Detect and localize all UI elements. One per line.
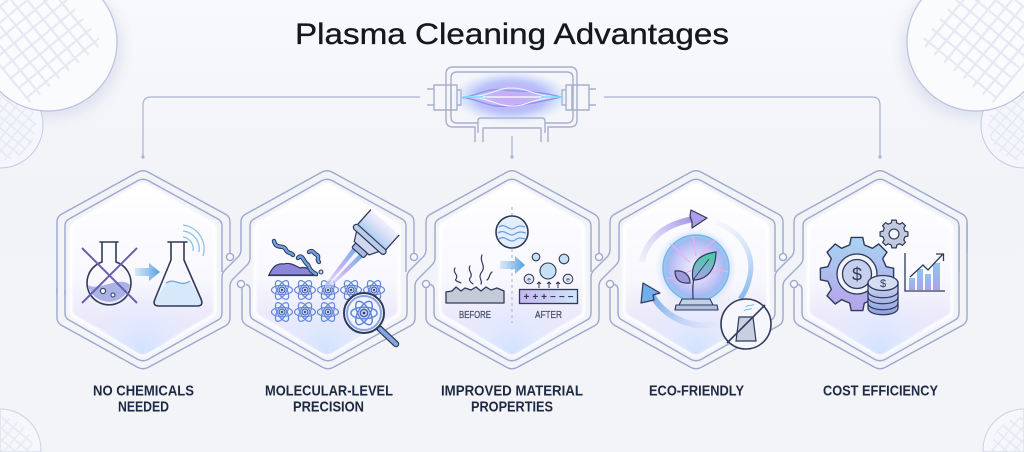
panel: cost efficiency xyxy=(808,184,952,400)
hexagon fill 4 xyxy=(624,184,768,354)
hexagon fill 5 xyxy=(808,184,952,354)
label: after: AFTER xyxy=(535,309,562,321)
panel: improved material properties xyxy=(440,184,584,416)
icon: no factory emissions xyxy=(721,299,771,349)
plasma chamber icon xyxy=(427,67,596,142)
label: improved material properties: IMPROVED MATERIAL xyxy=(441,382,583,400)
hexagon fill 3 xyxy=(440,184,584,354)
title: Plasma Cleaning Advantages xyxy=(295,18,729,51)
label: molecular-level precision: MOLECULAR-LEVEL xyxy=(265,382,393,400)
hexagon fill 2 xyxy=(255,184,399,354)
wafer: top right large xyxy=(902,0,1024,168)
icon: recycling arrows xyxy=(641,210,751,325)
hexagon connector lines xyxy=(57,171,967,369)
label: improved material properties: PROPERTIES xyxy=(471,398,553,416)
icon: growth chart xyxy=(905,253,945,291)
icon: after surface: + + + − − − xyxy=(524,292,574,303)
connector: centre arrow xyxy=(511,136,513,158)
icon: plasma nozzle xyxy=(310,208,401,302)
hexagon fill 1 xyxy=(71,184,215,354)
wafer: bottom left xyxy=(0,409,41,452)
connector: right branch arrow xyxy=(604,97,881,158)
label: before: BEFORE xyxy=(459,309,491,321)
icon: atom grid xyxy=(272,279,384,323)
icon: before surface xyxy=(446,255,504,303)
panel: eco-friendly xyxy=(624,184,771,400)
icon: contaminants xyxy=(268,241,323,276)
icon: large gear with dollar xyxy=(820,237,894,311)
icon: after surface xyxy=(520,253,578,304)
label: no chemicals needed: NO CHEMICALS xyxy=(93,382,194,400)
panel: molecular-level precision xyxy=(255,184,401,416)
icon: crossed round flask xyxy=(82,242,137,305)
icon: coin stack xyxy=(868,276,898,315)
icon: small gear xyxy=(880,220,908,248)
wafer: bottom right xyxy=(983,409,1024,452)
label: eco-friendly: ECO-FRIENDLY xyxy=(649,382,744,400)
divider: before and after xyxy=(511,207,513,323)
icon: clean conical flask xyxy=(154,225,204,306)
label: molecular-level precision: PRECISION xyxy=(293,398,364,416)
wafer: top left large xyxy=(0,0,122,168)
label: no chemicals needed xyxy=(93,382,194,416)
label: no chemicals needed: NEEDED xyxy=(118,398,169,416)
icon: plasma globe with plant xyxy=(659,231,733,310)
icon: arrow xyxy=(135,263,160,281)
label: cost efficiency: COST EFFICIENCY xyxy=(823,382,938,400)
icon: large gear with dollar: $ xyxy=(852,264,862,284)
panel: no chemicals needed xyxy=(71,184,215,416)
connector: left branch arrow xyxy=(142,97,420,158)
label: improved material properties xyxy=(441,382,583,416)
icon: plasma wave circle xyxy=(496,216,528,248)
icon: after surface: e xyxy=(527,276,531,284)
icon: coin stack: $ xyxy=(880,278,886,290)
icon: after surface: e xyxy=(566,276,570,284)
icon: arrow before to after xyxy=(500,256,525,274)
icon: magnifying glass with atom xyxy=(344,293,396,344)
label: molecular-level precision xyxy=(265,382,393,416)
